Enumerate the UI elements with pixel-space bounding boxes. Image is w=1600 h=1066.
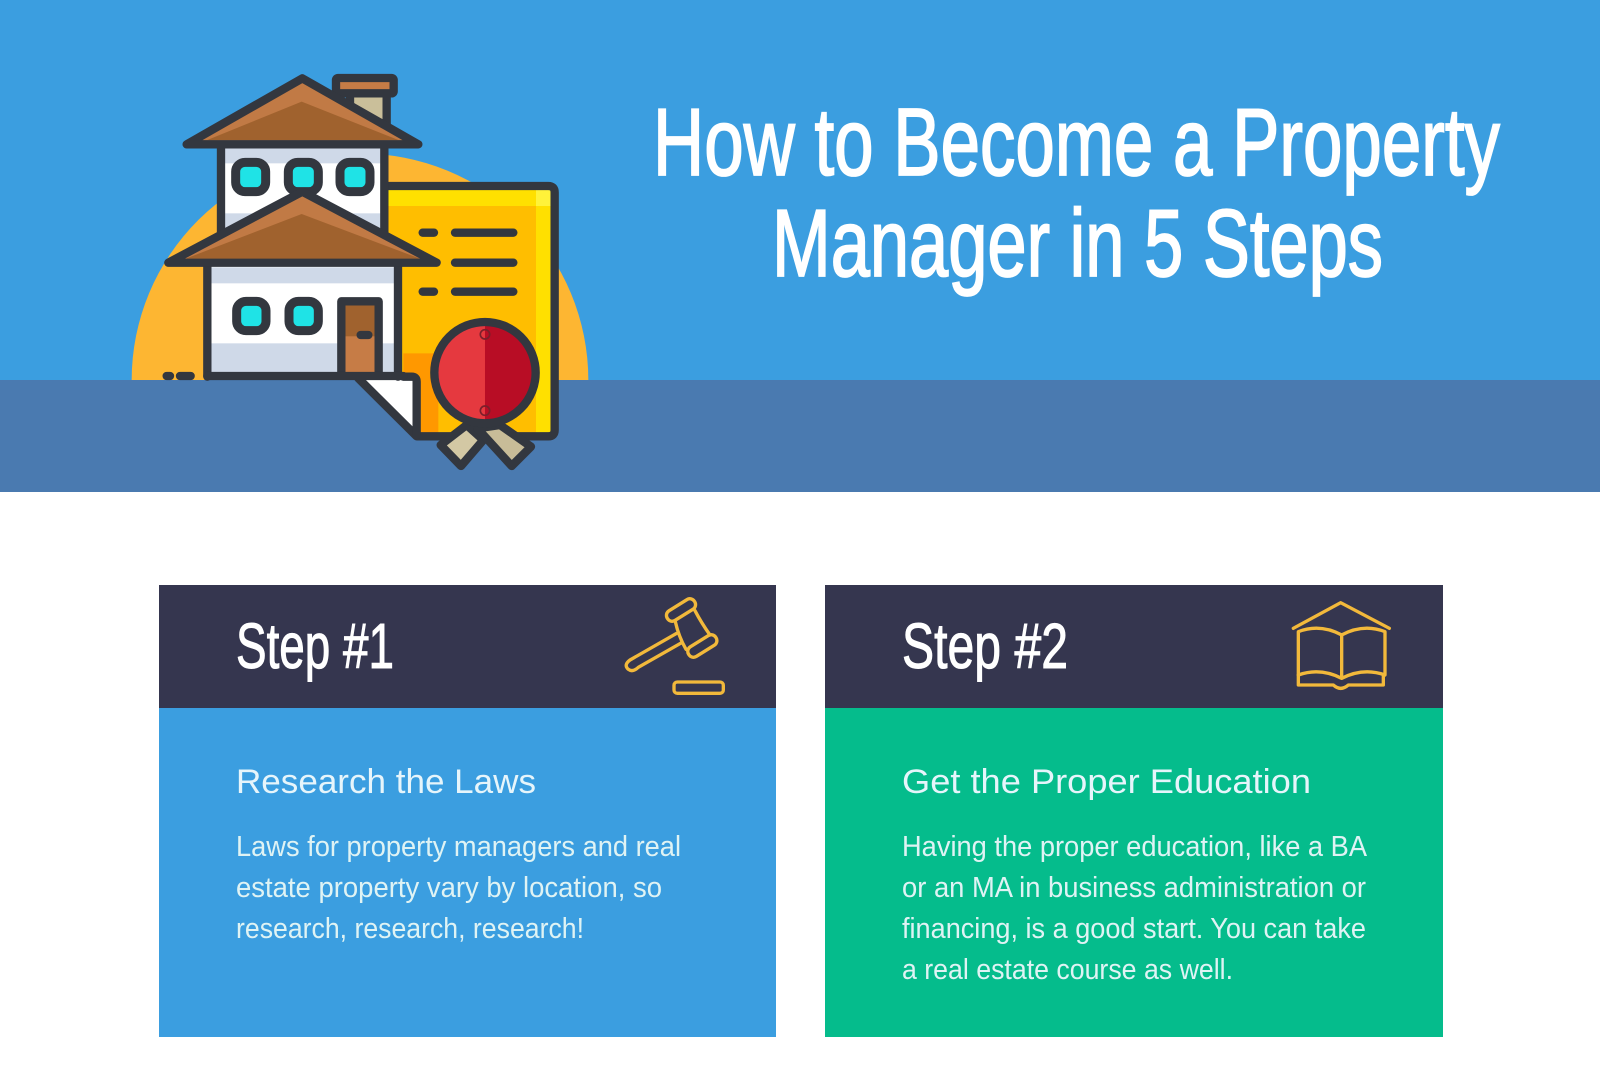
icon: upper storey [187,78,418,233]
text block: step 1 body [236,831,681,945]
text block: step 2 body: a real estate course as well. [902,954,1233,986]
heading: step 2: Step #2 [902,610,1068,682]
title [653,89,1500,297]
panel: step 2 [825,585,1443,1037]
text block: step 1 body: estate property vary by location, so [236,872,662,904]
icon: door [341,301,379,375]
icon: book with roof [1293,603,1389,688]
heading: step 1: Step #1 [236,610,394,682]
subheading: step 1: Research the Laws [236,763,536,801]
icon: certificate [358,186,555,436]
text block: step 2 body: Having the proper education, like a BA [902,831,1368,863]
text block: step 1 body: research, research, research! [236,913,584,945]
icon: gavel [626,597,723,693]
title: Manager in 5 Steps [772,190,1383,297]
icon: sun [132,153,588,380]
panel: header banner [0,0,1600,492]
icon: seal ribbons [441,425,531,466]
icon: lower storey [167,192,437,377]
icon: red seal [434,322,536,423]
text block: step 1 body: Laws for property managers and real [236,831,681,863]
text block: step 2 body [902,831,1368,986]
icon: chimney [336,78,394,123]
panel: step 1 [159,585,776,1037]
text block: step 2 body: or an MA in business administration or [902,872,1366,904]
subheading: step 2: Get the Proper Education [902,763,1311,801]
illustration: house and certificate on sun [132,78,588,466]
text block: step 2 body: financing, is a good start. You can take [902,913,1366,945]
